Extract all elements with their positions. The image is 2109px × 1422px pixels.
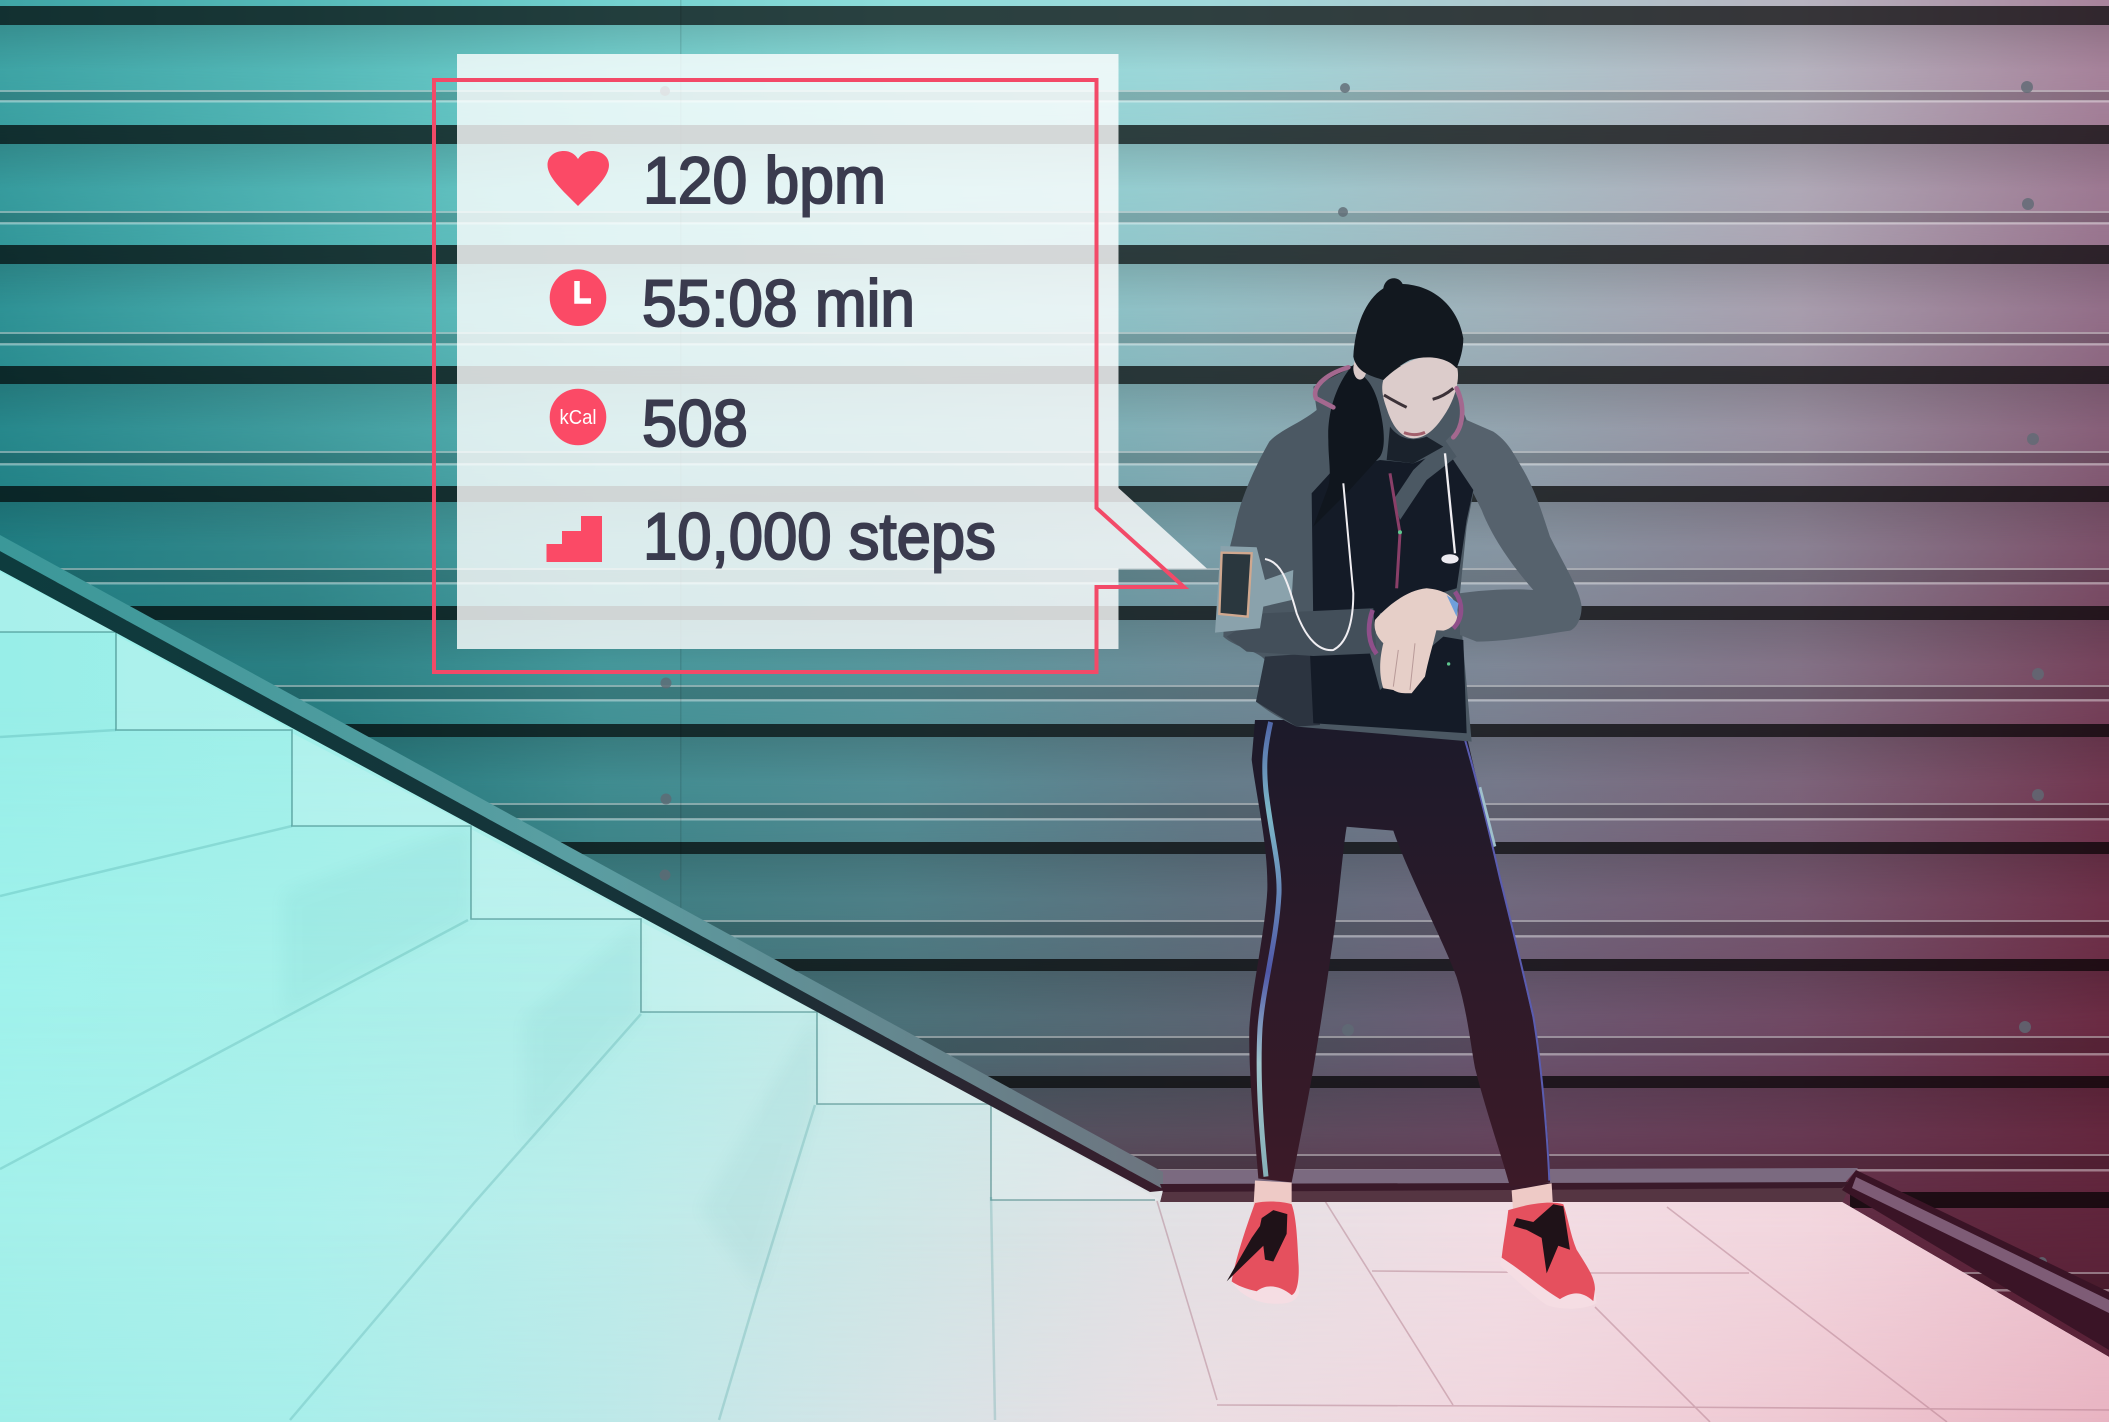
dark inner layer: [1310, 450, 1473, 733]
jacket lapel: [1393, 440, 1457, 520]
stat: duration: [550, 266, 915, 340]
stair riser shading: [544, 951, 808, 1260]
stat: heart rate: [548, 143, 886, 217]
lower right handrail: [1842, 1170, 2109, 1350]
hair: [1353, 278, 1463, 380]
stair handrail: [0, 535, 1850, 1192]
lower jacket shadow: [1256, 653, 1320, 727]
stat: calories: [550, 386, 748, 460]
stats callout panel: [457, 54, 1207, 649]
leg stripes: [1259, 722, 1549, 1181]
icon: kCal badge: [550, 389, 606, 445]
text: 120 bpm: 120 bpm: [643, 143, 886, 217]
floor tile lines: [1157, 1201, 2109, 1422]
wall face shading: [0, 25, 2109, 1133]
stairs and floor: [0, 500, 2109, 1422]
text: 508: 508: [642, 386, 748, 460]
ear: [1353, 357, 1367, 380]
ground colour field: [0, 500, 2109, 1422]
armband: [1215, 546, 1293, 633]
torso and arms: [1215, 278, 1582, 742]
face: [1382, 356, 1458, 438]
earbud: [1441, 554, 1459, 564]
wall panel seam: [680, 0, 682, 1000]
woman in running gear: [1215, 278, 1597, 1309]
icon: stairs: [546, 516, 602, 562]
watch: [1447, 595, 1458, 617]
wall base trim: [1150, 1168, 1858, 1186]
left forearm: [1227, 608, 1377, 656]
text: 10,000 steps: 10,000 steps: [643, 499, 996, 573]
left shoe: [1227, 1201, 1299, 1304]
stair tread edges: [0, 730, 995, 1420]
jacket body and left arm: [1223, 370, 1473, 742]
icon: heart: [548, 151, 609, 206]
right arm: [1443, 420, 1582, 642]
icon: clock: [550, 269, 606, 326]
zipper pull: [1390, 473, 1400, 588]
right shoe: [1500, 1203, 1597, 1309]
earphone cable: [1265, 453, 1455, 650]
stair cheek blocks: [0, 572, 886, 1103]
wall screws: [660, 81, 2047, 1267]
ankles: [1253, 1181, 1553, 1214]
finger creases: [1393, 643, 1415, 690]
icon: kCal badge: kCal: [560, 407, 596, 429]
ponytail: [1313, 363, 1384, 527]
hands: [1375, 588, 1458, 693]
stair joint lines: [0, 632, 1155, 1200]
hood trim: [1315, 367, 1462, 437]
text: 55:08 min: 55:08 min: [642, 266, 915, 340]
cuffs: [1369, 592, 1461, 654]
neck shadow: [1387, 427, 1443, 463]
stat: steps: [546, 499, 996, 573]
eyes and lips: [1384, 388, 1453, 435]
indicator dots: [1398, 530, 1450, 666]
callout red outline: [434, 80, 1184, 672]
legs: [1227, 720, 1597, 1309]
